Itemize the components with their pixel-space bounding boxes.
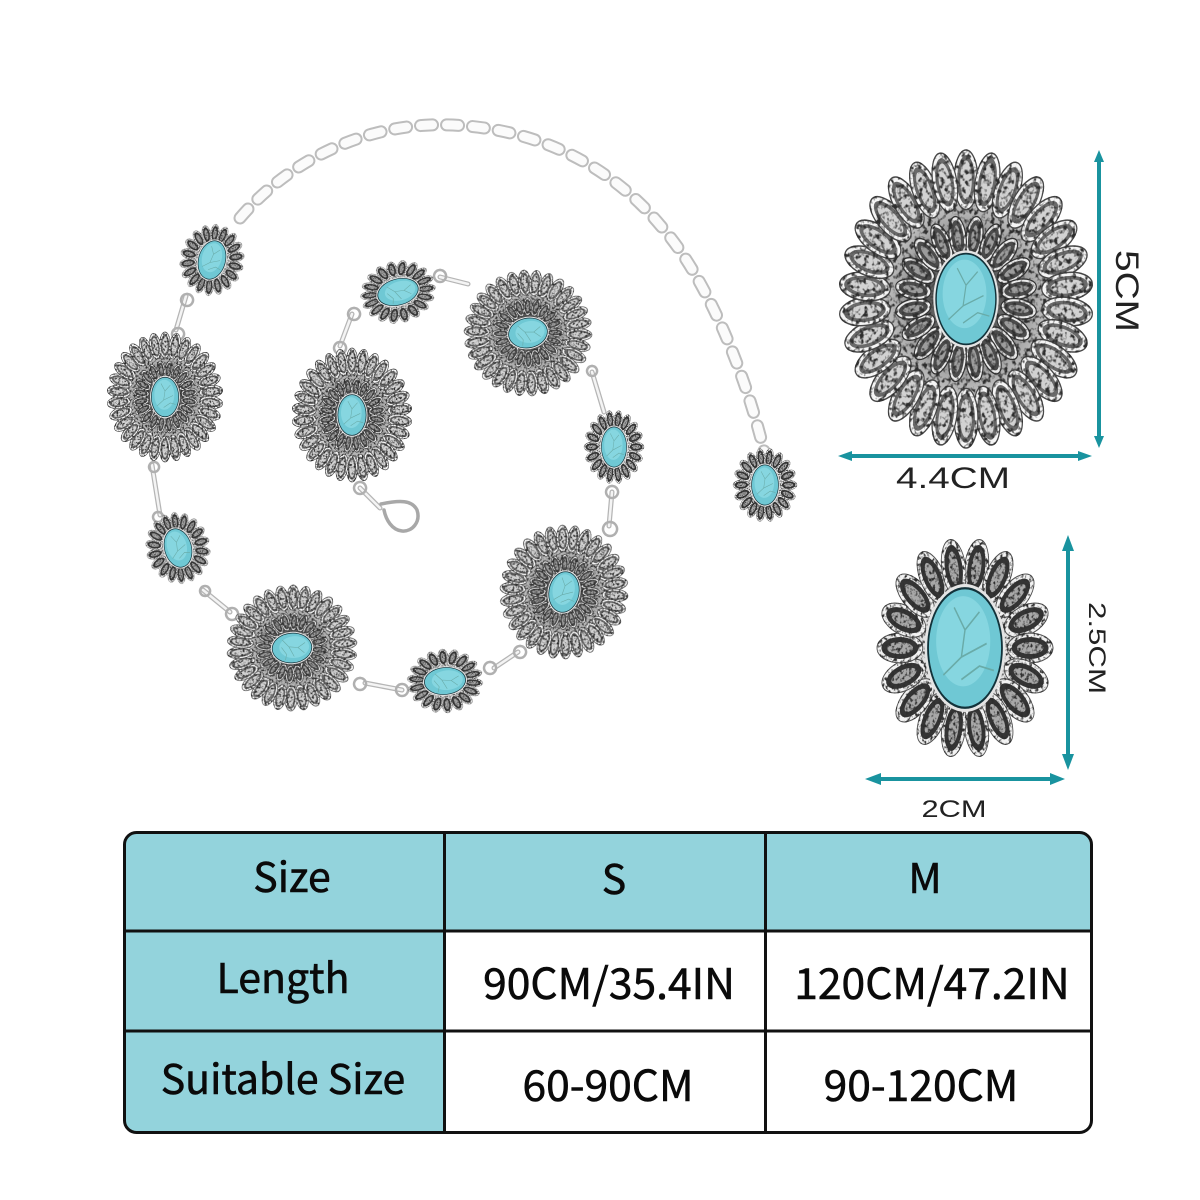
row: Length: 90CM/35.4IN: [483, 951, 735, 1012]
header row: Size, S, M: [253, 844, 942, 906]
dimension: 2.5CM height: 2.5CM: [1083, 602, 1110, 694]
dimension: 2.5CM height: [1062, 535, 1110, 770]
large concho 2: [292, 348, 412, 482]
dimension: 2CM width: 2CM: [922, 796, 986, 823]
row: Length: [217, 945, 1070, 1012]
small concho detail: [877, 537, 1053, 759]
small concho 1: [172, 217, 252, 303]
lobster clasp: [381, 502, 418, 531]
size table: [124, 832, 1092, 1132]
header row: Size, S, M: S: [602, 846, 626, 906]
large concho 1: [107, 332, 223, 462]
small concho 3: [584, 410, 644, 484]
row: Length: Length: [217, 945, 349, 1005]
large concho 5: [222, 579, 362, 717]
small concho 6: [733, 448, 797, 522]
table fills: [125, 833, 1090, 1131]
small concho 4: [138, 505, 218, 591]
row: Length: 120CM/47.2IN: [794, 951, 1070, 1012]
small concho 2: [353, 252, 443, 332]
dimension: 4.4CM width: 4.4CM: [896, 462, 1010, 495]
small concho 5: [404, 646, 486, 716]
header row: Size, S, M: Size: [253, 844, 331, 904]
row: Suitable Size: [161, 1046, 1018, 1114]
table grid: [124, 832, 1092, 1132]
belt: turquoise concho chain belt: [107, 125, 797, 717]
large concho 4: [489, 515, 639, 669]
dimension: 5CM height: 5CM: [1109, 250, 1145, 332]
row: Suitable Size: 60-90CM: [522, 1053, 694, 1114]
row: Suitable Size: 90-120CM: [824, 1053, 1018, 1114]
large concho detail: [838, 150, 1094, 448]
dimension: 2CM width: [865, 773, 1065, 823]
row: Suitable Size: Suitable Size: [161, 1046, 405, 1106]
belt chain links: [149, 125, 765, 696]
dimension: 4.4CM width: [838, 451, 1092, 495]
large concho 3: [454, 260, 602, 406]
dimension: 5CM height: [1094, 150, 1145, 448]
header row: Size, S, M: M: [908, 845, 942, 905]
